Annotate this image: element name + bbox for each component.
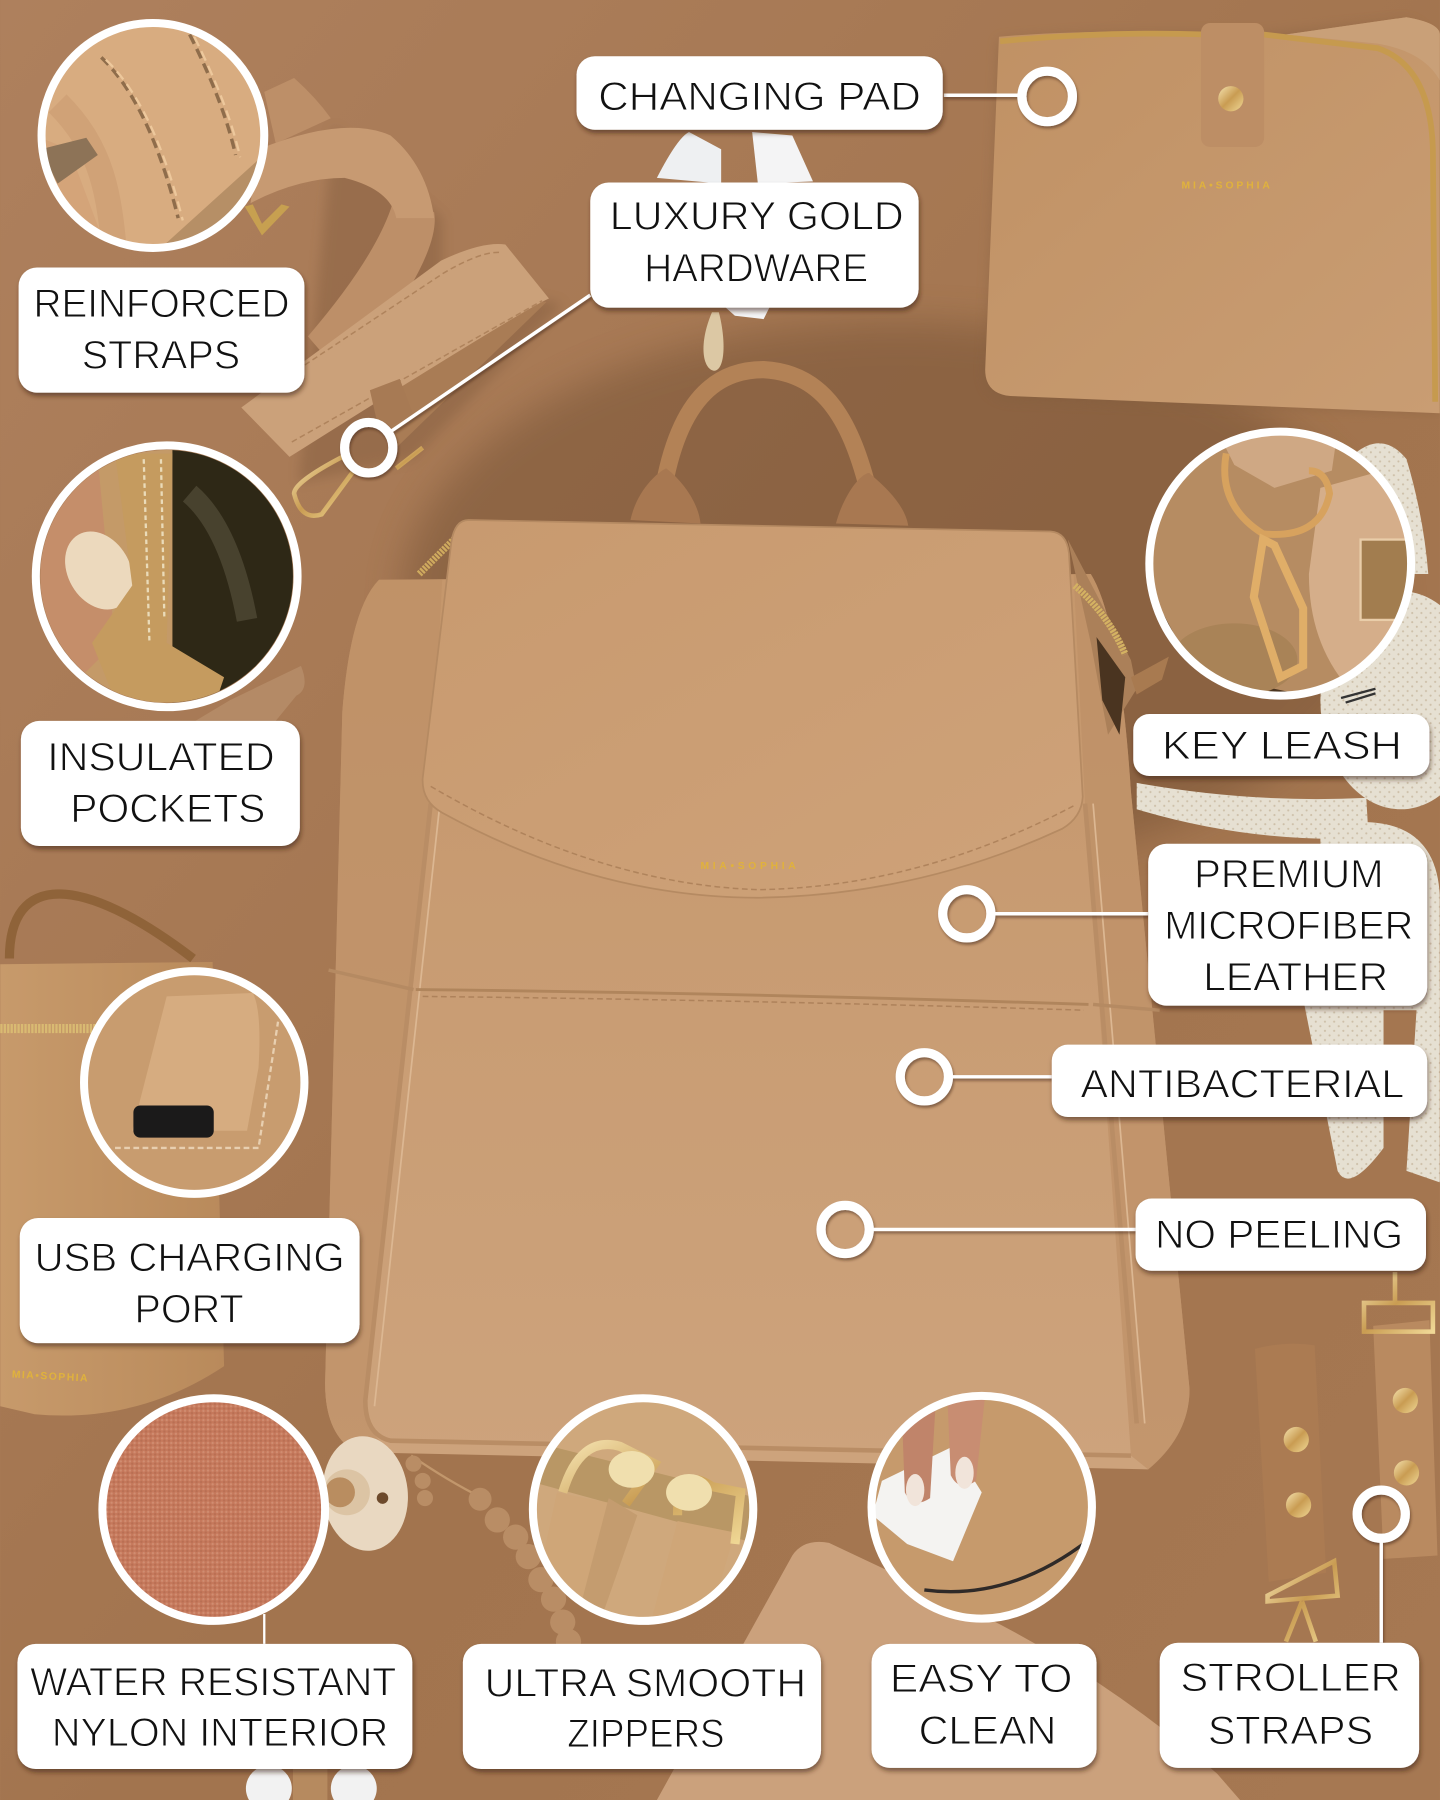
stroller straps accessory: [1255, 1272, 1437, 1642]
detail circle: easy to clean: [867, 1395, 1097, 1624]
callout: antibacterial: ANTIBACTERIAL: [1080, 1061, 1404, 1106]
front pocket seam: [416, 990, 1088, 1004]
callout: luxury gold hardware: HARDWARE: [644, 245, 868, 290]
callout: usb charging port: USB CHARGING: [35, 1235, 345, 1280]
callout: antibacterial: [1052, 1045, 1427, 1117]
detail circle: reinforced straps: [35, 17, 276, 258]
backpack main body: [325, 574, 1190, 1469]
bunny toy: [1137, 443, 1440, 1182]
callout: easy to clean: EASY TO: [890, 1656, 1072, 1701]
side gussets: [325, 574, 1190, 1469]
detail circle: insulated pockets: [29, 442, 304, 717]
callout: insulated pockets: [21, 721, 300, 846]
callout: stroller straps: [1160, 1643, 1419, 1768]
callout: luxury gold hardware: [590, 183, 919, 308]
callout: insulated pockets: INSULATED: [47, 734, 275, 779]
callout: reinforced straps: REINFORCED: [34, 281, 290, 326]
pad snap tab: [1201, 23, 1264, 147]
callout: easy to clean: CLEAN: [919, 1708, 1056, 1753]
callout: changing pad: [577, 56, 943, 130]
callout: insulated pockets: POCKETS: [70, 786, 265, 831]
tube logo: MIA•SOPHIA: [12, 1370, 88, 1385]
backpack: [325, 370, 1190, 1469]
white teether beads: [246, 1766, 377, 1800]
callout: changing pad: CHANGING PAD: [598, 74, 921, 119]
backpack handle: [630, 370, 908, 526]
callout: no peeling: [1136, 1198, 1426, 1271]
long strap accessory: [241, 78, 563, 516]
detail circle: key leash: [1142, 425, 1424, 712]
connector: stroller straps: [1357, 1490, 1405, 1643]
callout: ultra smooth zippers: ULTRA SMOOTH: [485, 1661, 806, 1706]
callout: usb charging port: PORT: [135, 1286, 244, 1331]
strap shadow: [299, 126, 563, 482]
callout: key leash: KEY LEASH: [1162, 723, 1402, 768]
callout: ultra smooth zippers: [463, 1644, 821, 1769]
connector: water resistant: [263, 1614, 265, 1644]
callout: water resistant nylon interior: NYLON INTERIOR: [52, 1710, 388, 1755]
callout: ultra smooth zippers: ZIPPERS: [567, 1711, 725, 1756]
callout: premium microfiber leather: PREMIUM: [1194, 851, 1384, 896]
connector: changing pad: [944, 71, 1072, 122]
pad logo: MIA•SOPHIA: [1181, 180, 1270, 191]
white bow and elastic: [657, 132, 813, 371]
detail circle: nylon interior: [102, 1398, 325, 1621]
connector: premium microfiber leather: [943, 890, 1148, 938]
top zipper right: [1068, 540, 1169, 735]
top zipper left: [419, 534, 459, 574]
callout: premium microfiber leather: MICROFIBER: [1164, 903, 1413, 948]
connector: antibacterial: [900, 1053, 1052, 1101]
lunch tube: [0, 894, 224, 1416]
callout: easy to clean: [872, 1644, 1097, 1768]
bottom pouch: [657, 1542, 1240, 1800]
callout: usb charging port: [20, 1218, 360, 1343]
detail circle: zippers: [528, 1395, 758, 1630]
callout: premium microfiber leather: [1148, 844, 1427, 1006]
callout: key leash: [1133, 714, 1429, 776]
callout: water resistant nylon interior: WATER RESISTANT: [30, 1660, 396, 1705]
connector: luxury gold hardware: [345, 295, 590, 473]
connector: no peeling: [821, 1205, 1136, 1254]
callout: luxury gold hardware: LUXURY GOLD: [610, 194, 904, 239]
flap: [423, 520, 1083, 898]
callout: reinforced straps: [19, 267, 304, 393]
callout: water resistant nylon interior: [17, 1644, 412, 1769]
side pockets: [329, 970, 1160, 1010]
callout: stroller straps: STROLLER: [1180, 1655, 1401, 1700]
callout: stroller straps: STRAPS: [1208, 1708, 1373, 1753]
callout: premium microfiber leather: LEATHER: [1203, 955, 1388, 1000]
small toy behind insulated circle: [195, 666, 305, 721]
pacifier and beads: [317, 1432, 581, 1654]
callout: no peeling: NO PEELING: [1155, 1212, 1403, 1257]
changing pad: [985, 17, 1440, 413]
detail circle: usb charging port: [81, 970, 310, 1200]
callout: reinforced straps: STRAPS: [82, 332, 240, 377]
flap logo: MIA•SOPHIA: [700, 861, 796, 872]
backpack drop shadow: [402, 321, 1389, 872]
